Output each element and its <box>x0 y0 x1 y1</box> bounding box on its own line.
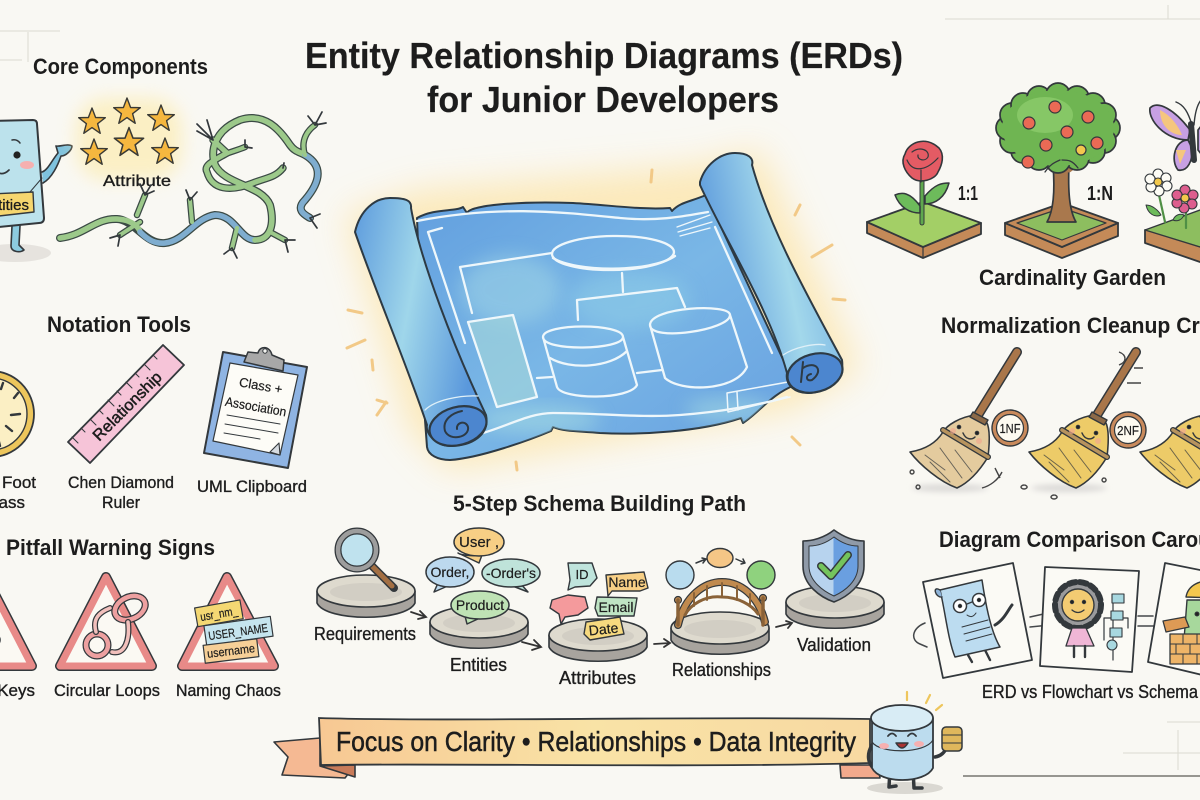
step 4: relationships <box>666 548 775 680</box>
icon: naming chaos sign: username <box>206 641 256 661</box>
icon: UML clipboard <box>204 348 307 468</box>
blueprint sheet <box>417 195 795 460</box>
item: 1:1 rose planter <box>867 141 981 258</box>
hero: blueprint scroll <box>345 150 860 470</box>
arrow: step 2 to 3 <box>522 640 541 650</box>
arrows: flowchart to schema <box>1138 616 1157 626</box>
label: UML clipboard: UML Clipboard <box>197 477 307 496</box>
right roll <box>700 153 847 399</box>
icon: naming chaos sign: usr_nm_ <box>199 604 239 624</box>
icon: tangled relationship lines <box>60 112 326 258</box>
icon: naming chaos sign: USER_NAME <box>207 621 269 643</box>
step 1: requirements: Requirements <box>314 624 416 644</box>
panel: normalization cleanup crew <box>910 313 1200 499</box>
arrow: step 3 to 4 <box>654 639 670 647</box>
icon: 2NF broom <box>1021 352 1143 499</box>
icon: database mascot <box>867 692 962 794</box>
card: ERD <box>923 563 1032 678</box>
step 3: attributes: Attributes <box>559 668 636 688</box>
banner ribbon <box>319 718 870 765</box>
labels: pitfall signs <box>0 681 281 700</box>
step 2: entities: -Order's <box>486 565 536 581</box>
badge: 1NF <box>992 410 1028 446</box>
labels: pitfall signs: Circular Loops <box>54 681 160 700</box>
arrows: ERD to flowchart <box>1030 613 1051 630</box>
step 5: validation: Validation <box>797 635 871 655</box>
icon: circular loops sign <box>60 577 152 666</box>
heading: schema path: 5-Step Schema Building Path <box>453 491 746 516</box>
step 3: attributes: ID <box>576 567 588 582</box>
badge: 2NF <box>1110 412 1146 448</box>
panel: cardinality garden <box>867 83 1200 290</box>
icon: crow's foot compass <box>0 371 34 457</box>
card: schema builder <box>1148 563 1200 678</box>
icon: naming chaos sign <box>182 577 274 666</box>
icon: UML clipboard: Association <box>224 394 288 419</box>
step 3: attributes: Email <box>598 599 634 615</box>
step 3: attributes: Date <box>588 620 619 639</box>
arrow: step 1 to 2 <box>411 611 426 619</box>
item: M:N flower planter with butterfly <box>1145 97 1200 262</box>
item: 1:N tree planter <box>996 83 1120 258</box>
step 2: entities: Entities <box>450 655 507 675</box>
banner text: Focus on Clarity • Relationships • Data Integrity <box>336 726 856 757</box>
title: Entity Relationship Diagrams (ERDs) <box>305 35 903 76</box>
icon: chen diamond ruler <box>68 345 184 463</box>
sheet mottling <box>460 255 775 434</box>
glow behind scroll <box>345 150 860 470</box>
step 5: validation <box>786 530 884 655</box>
panel: notation tools <box>0 312 307 512</box>
label: chen diamond ruler: Ruler <box>102 493 140 512</box>
step 1: requirements <box>314 531 416 644</box>
icon: chen diamond ruler: Relationship <box>90 369 166 445</box>
banner: focus statement <box>274 718 880 778</box>
step 3: attributes <box>549 563 648 688</box>
icon: 3NF broom <box>1140 352 1200 488</box>
motion marks left of carousel <box>914 623 927 647</box>
heading: cardinality garden: Cardinality Garden <box>979 265 1166 290</box>
step 2: entities <box>426 528 540 675</box>
icon: UML clipboard: Class + <box>238 374 284 397</box>
badge: 2NF: 2NF <box>1117 423 1139 438</box>
label: crow's foot compass <box>0 473 36 512</box>
blueprint drawing <box>417 211 790 433</box>
panel: diagram comparison carousel <box>914 527 1200 702</box>
badge: 1NF: 1NF <box>1000 421 1021 436</box>
icon: attribute stars <box>76 98 182 190</box>
step 4: relationships: Relationships <box>672 660 771 680</box>
banner tails <box>274 738 880 778</box>
label: chen diamond ruler <box>68 473 174 512</box>
panel: pitfall warning signs <box>0 535 281 700</box>
label: chen diamond ruler: Chen Diamond <box>68 473 174 492</box>
icon: missing keys sign <box>0 577 32 666</box>
label: 1:1: 1:1 <box>958 183 978 205</box>
card: flowchart <box>1040 567 1139 672</box>
title <box>305 35 903 120</box>
label: 1:N: 1:N <box>1087 183 1113 205</box>
step 2: entities: Order, <box>431 564 469 580</box>
panel: core components <box>0 54 326 262</box>
arrow: step 4 to 5 <box>776 621 792 628</box>
sparks around scroll <box>347 170 845 470</box>
icon: 1NF broom <box>910 352 1017 492</box>
heading: notation tools: Notation Tools <box>47 312 191 337</box>
icon: attribute stars: Attribute <box>103 173 171 190</box>
step 2: entities: Product <box>456 597 504 613</box>
labels: pitfall signs: Naming Chaos <box>176 681 281 700</box>
icon: entity character <box>0 120 72 262</box>
panel: 5-step schema building path <box>314 491 884 688</box>
heading: core components: Core Components <box>33 54 208 79</box>
heading: pitfall warning signs: Pitfall Warning Signs <box>6 535 215 560</box>
title: for Junior Developers <box>427 79 779 120</box>
step 2: entities: User , <box>459 534 499 551</box>
left roll <box>355 198 491 452</box>
step 3: attributes: Name <box>608 574 646 590</box>
